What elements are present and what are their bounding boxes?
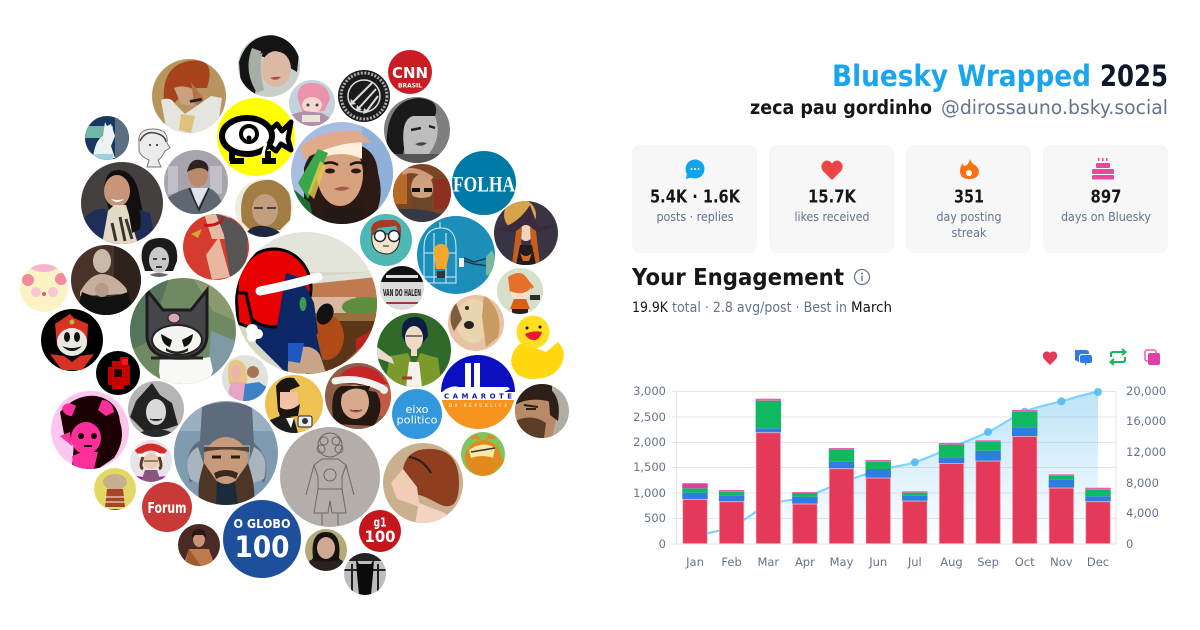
panel: days on Bluesky: 897 — [1090, 186, 1122, 208]
month labels: Jul — [907, 555, 922, 569]
avatar: woman in blue blazer — [81, 162, 163, 244]
avatar: witch girl — [494, 199, 558, 265]
avatar: pink cream creature — [20, 264, 68, 312]
avatar: ink drawn face — [139, 237, 179, 277]
avatar: sketch character — [139, 129, 170, 167]
stacked bars — [682, 399, 1111, 544]
avatar: pale figure in dark room — [71, 245, 141, 315]
avatar: Camarote da Republica — [441, 355, 515, 430]
left axis labels: 3,000 — [633, 384, 666, 398]
avatar: black and white woman with hat — [128, 381, 184, 437]
left axis labels: 2,500 — [633, 410, 666, 424]
icon: rubber duck — [511, 316, 564, 379]
month labels: Feb — [721, 555, 742, 569]
panel: day posting streak: streak — [952, 225, 987, 240]
avatar: Forum logo — [142, 482, 192, 532]
panel: day posting streak: 351 — [954, 186, 984, 208]
avatar: g1 100: 100 — [364, 527, 396, 546]
avatar: CNN Brasil — [388, 50, 432, 94]
panel: day posting streak: day posting — [936, 209, 1002, 224]
avatar: woman with santa hat — [325, 363, 391, 429]
avatar: woman with grey streak — [238, 35, 300, 97]
user name and handle: zeca pau gordinho — [750, 96, 932, 119]
icon: likes — [1043, 351, 1057, 365]
avatar: jack frost mascot — [41, 309, 103, 371]
icon: heart — [821, 161, 843, 180]
likes segments — [683, 433, 1110, 544]
panel: likes received: 15.7K — [808, 186, 857, 208]
left axis labels: 1,500 — [633, 460, 666, 474]
avatar: dark figure — [344, 553, 386, 595]
avatar: g1 100: g1 — [374, 516, 386, 530]
engagement summary: March — [851, 300, 892, 316]
icon: birthday cake — [1092, 158, 1114, 180]
avatar: cartoon grandma with santa hat — [130, 440, 172, 482]
right axis labels: 0 — [1126, 537, 1133, 551]
month labels — [685, 555, 1109, 569]
month labels: Oct — [1015, 555, 1035, 569]
grid lines — [672, 391, 1116, 544]
avatar: sonic in santa hat — [235, 232, 390, 374]
avatar: bald bearded man — [393, 164, 451, 222]
right axis labels: 4,000 — [1126, 506, 1159, 520]
icon: replies — [1075, 350, 1092, 366]
avatar: kuromi — [130, 278, 236, 384]
panel: posts and replies — [632, 145, 757, 253]
avatar: red pixel art — [96, 351, 140, 395]
icon: speech bubble — [686, 160, 704, 179]
avatar: Folha logo: FOLHA — [453, 172, 515, 196]
left axis labels: 0 — [659, 537, 666, 551]
avatar: Forum logo: Forum — [148, 499, 186, 517]
panel: likes received — [769, 145, 894, 253]
icon: flame — [960, 159, 979, 179]
month labels: Nov — [1050, 555, 1073, 569]
avatar: teal cartoon with glasses — [360, 214, 412, 266]
avatar: pencil sketch — [280, 427, 380, 527]
avatar: pink cartoon girl — [51, 391, 129, 469]
avatar: red haired character — [152, 59, 226, 133]
avatar: dog in red sweater — [94, 468, 136, 510]
avatar: illustrated woman in red — [183, 214, 249, 280]
left axis labels: 2,000 — [633, 435, 666, 449]
avatar: eixo politico: eixo — [406, 404, 428, 416]
quotes segments — [682, 399, 1111, 493]
right axis labels: 20,000 — [1126, 384, 1166, 398]
user name and handle: @dirossauno.bsky.social — [941, 96, 1168, 119]
avatar: Folha logo — [452, 151, 516, 215]
avatar: black arrows badge — [338, 70, 390, 122]
panel: posts and replies: 5.4K · 1.6K — [650, 186, 741, 208]
user name and handle — [750, 96, 1168, 119]
month labels: Jun — [868, 555, 887, 569]
cumulative area — [695, 392, 1098, 544]
month labels: Apr — [795, 555, 815, 569]
avatar: O Globo 100: O GLOBO — [234, 517, 290, 531]
avatar: pink anime character — [289, 80, 335, 126]
avatar: curly haired man with glasses — [235, 179, 293, 237]
left axis labels: 500 — [644, 511, 666, 525]
icon: quotes — [1145, 350, 1160, 365]
avatar: woman in green blazer — [377, 313, 451, 387]
avatar: CNN Brasil: BRASIL — [398, 82, 422, 90]
right axis labels: 8,000 — [1126, 476, 1159, 490]
avatar: Van Do Halen sign — [380, 266, 424, 310]
engagement summary: 19.9K — [632, 300, 669, 316]
left axis labels — [633, 384, 666, 551]
title: Bluesky Wrapped — [832, 59, 1091, 93]
line points — [911, 388, 1102, 466]
avatar: woman portrait painting — [178, 524, 220, 566]
avatar: pink couple — [222, 355, 268, 401]
avatar: red haired painting — [383, 443, 463, 523]
cumulative line — [695, 392, 1098, 535]
reposts segments — [682, 401, 1111, 497]
avatar cluster: VAN DO HALEN — [383, 288, 421, 299]
month labels: Aug — [940, 555, 963, 569]
avatar: eixo politico — [392, 389, 442, 439]
avatar: crash bandicoot — [497, 268, 543, 314]
right axis labels: 16,000 — [1126, 414, 1166, 428]
month labels: May — [830, 555, 854, 569]
month labels: Mar — [757, 555, 779, 569]
icon: info — [854, 270, 870, 284]
month labels: Jan — [685, 555, 704, 569]
heading: Your Engagement: Your Engagement — [631, 265, 844, 291]
avatar cluster — [20, 35, 569, 595]
avatar: black and white woman — [384, 97, 450, 163]
avatar: golden dog — [448, 295, 504, 351]
panel: likes received: likes received — [794, 209, 870, 224]
replies segments — [682, 427, 1111, 504]
avatar: bearded man selfie — [515, 384, 569, 438]
avatar: lightbulb in birdcage — [417, 216, 495, 294]
panel: days on Bluesky: days on Bluesky — [1061, 209, 1152, 224]
panel: days on Bluesky — [1043, 145, 1168, 253]
chart legend icons — [1043, 349, 1160, 366]
icon: reposts — [1110, 349, 1126, 365]
avatar: Camarote da Republica: CAMAROTE — [444, 392, 512, 400]
avatar: woman shading eyes with rainbow — [291, 122, 393, 224]
avatar: yellow fish logo — [217, 98, 295, 176]
panel: day posting streak — [906, 145, 1031, 253]
avatar: O Globo 100: 100 — [234, 530, 290, 564]
right axis labels: 12,000 — [1126, 445, 1166, 459]
avatar: smiling man in sweater — [164, 150, 228, 214]
avatar: man in fur hat — [174, 401, 278, 505]
left axis labels: 1,000 — [633, 486, 666, 500]
avatar: Garfield — [461, 432, 508, 476]
month labels: Dec — [1087, 555, 1109, 569]
month labels: Sep — [977, 555, 999, 569]
chart: monthly engagement stacked bars with cumulative line — [633, 384, 1166, 569]
engagement summary: total · 2.8 avg/post · Best in — [672, 300, 847, 316]
avatar: CNN Brasil: CNN — [392, 64, 428, 82]
avatar: mustached cartoon man — [265, 375, 323, 433]
right axis labels — [1126, 384, 1166, 551]
title: 2025 — [1100, 59, 1168, 93]
avatar: g1 100 — [359, 510, 401, 552]
avatar: Camarote da Republica: DA REPÚBLICA — [449, 403, 507, 408]
avatar: moomin — [85, 116, 129, 160]
panel: posts and replies: posts · replies — [656, 209, 734, 224]
avatar: long haired man — [305, 529, 347, 571]
avatar: eixo politico: politico — [396, 414, 438, 426]
avatar: O Globo 100 — [223, 500, 301, 578]
